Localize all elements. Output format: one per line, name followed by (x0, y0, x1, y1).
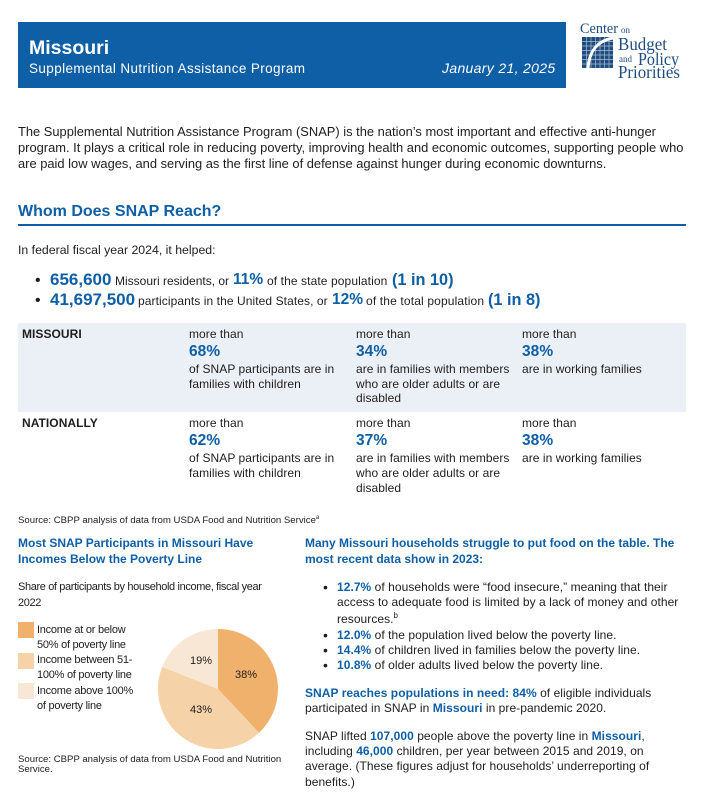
stat: working families: 38% (522, 432, 553, 449)
stat: families with children: 68% (189, 343, 220, 360)
date: January 21, 2025 (442, 60, 555, 76)
pie chart (158, 629, 278, 749)
hardship bullets: 12.7% of households were “food insecure,” meaning that their (337, 580, 668, 594)
reach bullets: (1 in 8) (488, 290, 540, 308)
stat: older adults or disabled (356, 327, 509, 405)
stat: older adults or disabled: 37% (356, 432, 387, 449)
poverty impact text: benefits.) (305, 775, 355, 789)
hardship bullets: • (323, 642, 328, 658)
intro paragraph: program. It plays a critical role in reducing poverty, improving health and economic outcomes, supporting people who (18, 140, 683, 155)
stat: older adults or disabled: are in families with members (356, 451, 509, 465)
lead-in text: In federal fiscal year 2024, it helped: (18, 243, 216, 257)
row label: MISSOURI (22, 327, 82, 341)
chart source note: Source: CBPP analysis of data from USDA Food and Nutrition (18, 754, 281, 765)
chart legend: of poverty line (37, 700, 102, 712)
poverty impact text: including 46,000 children, per year between 2015 and 2019, on (305, 744, 644, 758)
stat: older adults or disabled: disabled (356, 391, 401, 405)
logo: Center on Budget and Policy Priorities: Center (580, 21, 618, 37)
stat: families with children: 62% (189, 432, 220, 449)
table source note: Source: CBPP analysis of data from USDA Food and Nutrition Servicea (18, 515, 319, 526)
stat: families with children (189, 416, 334, 480)
stat: older adults or disabled: are in families with members (356, 362, 509, 376)
stat: older adults or disabled: more than (356, 416, 410, 430)
reach bullets: of the state population (267, 274, 387, 288)
hardship bullets: • (323, 657, 328, 673)
participation text: participated in SNAP in Missouri in pre-pandemic 2020. (305, 701, 606, 715)
stat: working families: are in working families (522, 451, 642, 465)
stat: working families: are in working families (522, 362, 642, 376)
food insecurity heading (305, 536, 674, 566)
stat: older adults or disabled: disabled (356, 481, 401, 495)
chart legend: Income at or below (37, 624, 125, 636)
stat: older adults or disabled: more than (356, 327, 410, 341)
chart source note (18, 754, 281, 775)
reach bullets: 12% (332, 291, 363, 308)
food insecurity heading: Many Missouri households struggle to put food on the table. The (305, 536, 674, 550)
stat: families with children: families with children (189, 377, 301, 391)
section heading: Whom Does SNAP Reach?: Whom Does SNAP Reach? (18, 203, 221, 220)
chart legend: Income above 100% (37, 685, 133, 697)
panel: national row (22, 416, 642, 495)
food insecurity heading: most recent data show in 2023: (305, 552, 483, 566)
header banner (18, 22, 566, 88)
stat: families with children (189, 327, 334, 391)
chart heading (18, 536, 253, 566)
logo: Center on Budget and Policy Priorities: and (619, 54, 632, 64)
reach bullets: Missouri residents, or (115, 274, 229, 288)
stat: older adults or disabled: who are older adults or are (356, 377, 500, 391)
hardship bullets: access to adequate food is limited by a lack of money and other (337, 595, 678, 609)
section heading: Whom Does SNAP Reach? (18, 203, 686, 226)
hardship bullets: • (323, 627, 328, 643)
hardship bullets: 10.8% of older adults lived below the poverty line. (337, 658, 603, 672)
participation text (305, 686, 651, 715)
reach bullets: • (35, 292, 41, 309)
poverty impact text: average. (These figures adjust for households’ underreporting of (305, 759, 649, 773)
chart legend: 100% of poverty line (37, 669, 132, 681)
logo: Center on Budget and Policy Priorities: Policy (638, 49, 679, 69)
reach bullets: participants in the United States, or (138, 294, 328, 308)
hardship bullets (323, 579, 678, 673)
chart source note: Service. (18, 764, 53, 775)
row label: NATIONALLY (22, 416, 98, 430)
stat: families with children: of SNAP participants are in (189, 362, 334, 376)
chart heading: Most SNAP Participants in Missouri Have (18, 536, 253, 550)
stat: families with children: of SNAP participants are in (189, 451, 334, 465)
hardship bullets: • (323, 579, 328, 595)
stat: working families (522, 416, 642, 465)
hardship bullets: 12.0% of the population lived below the poverty line. (337, 628, 617, 642)
stat: working families: more than (522, 416, 576, 430)
logo: Center on Budget and Policy Priorities: Budget (618, 34, 667, 54)
reach bullets: 656,600 (50, 270, 111, 288)
participation text: SNAP reaches populations in need: 84% of eligible individuals (305, 686, 651, 700)
state title: Missouri (29, 37, 109, 59)
panel: Missouri row (18, 323, 686, 412)
pie chart: 19% (190, 655, 212, 667)
stat: families with children: more than (189, 416, 243, 430)
pie chart: 43% (190, 704, 212, 716)
chart subtitle: 2022 (18, 597, 41, 609)
chart heading: Incomes Below the Poverty Line (18, 552, 202, 566)
reach bullets: • (35, 272, 41, 289)
logo: Center on Budget and Policy Priorities: Priorities (618, 62, 680, 82)
stat: older adults or disabled: 34% (356, 343, 387, 360)
program name: Supplemental Nutrition Assistance Program (29, 61, 305, 76)
chart subtitle: Share of participants by household income, fiscal year (18, 581, 262, 593)
pie chart: 38% (235, 669, 257, 681)
intro paragraph: The Supplemental Nutrition Assistance Program (SNAP) is the nation’s most important and effective anti-hunger (18, 124, 656, 139)
stat: older adults or disabled (356, 416, 509, 495)
stat: working families (522, 327, 642, 376)
reach bullets: 41,697,500 (50, 290, 135, 308)
intro paragraph (18, 124, 683, 171)
hardship bullets: 14.4% of children lived in families below the poverty line. (337, 643, 640, 657)
stat: families with children: more than (189, 327, 243, 341)
logo: Center on Budget and Policy Priorities (580, 21, 680, 82)
reach bullets: of the total population (366, 294, 484, 308)
logo: Center on Budget and Policy Priorities: on (621, 25, 630, 35)
reach bullets: (1 in 10) (392, 270, 454, 288)
chart legend (18, 622, 133, 712)
chart legend: Income between 51- (37, 654, 132, 666)
reach bullets (35, 270, 540, 309)
intro paragraph: are paid low wages, and serving as the first line of defense against hunger during economic downturns. (18, 156, 606, 171)
poverty impact text (305, 729, 650, 789)
chart subtitle (18, 581, 262, 609)
hardship bullets: resources.b (337, 611, 398, 626)
stat: working families: 38% (522, 343, 553, 360)
stat: working families: more than (522, 327, 576, 341)
reach bullets: 11% (233, 271, 263, 288)
poverty impact text: SNAP lifted 107,000 people above the poverty line in Missouri, (305, 729, 645, 743)
chart legend: 50% of poverty line (37, 639, 126, 651)
stat: older adults or disabled: who are older adults or are (356, 466, 500, 480)
stat: families with children: families with children (189, 466, 301, 480)
